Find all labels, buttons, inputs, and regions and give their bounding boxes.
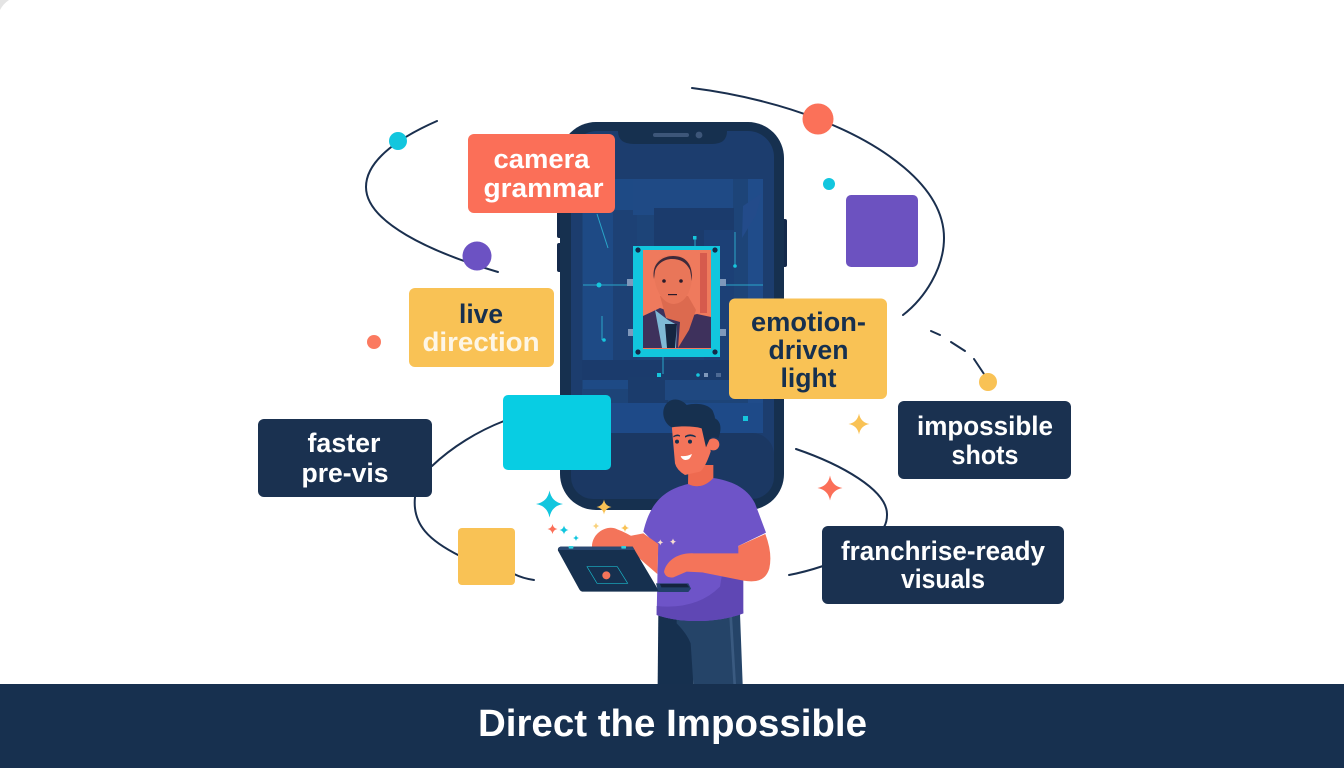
connector lines: left bbox=[415, 421, 534, 580]
tag: franchrise-ready visuals: visuals bbox=[901, 564, 985, 594]
portrait eyes and mouth bbox=[662, 279, 683, 295]
tag: impossible shots: shots bbox=[952, 440, 1018, 470]
orbit line: dashed to yellow dot bbox=[931, 331, 984, 374]
orbit line: top right bbox=[692, 88, 944, 315]
phone body bbox=[560, 122, 784, 510]
connector lines: right bbox=[789, 449, 887, 575]
tag: emotion-driven light: light bbox=[780, 363, 837, 393]
tag: franchrise-ready visuals: franchrise-ready bbox=[841, 536, 1045, 566]
decorative squares bbox=[458, 195, 918, 585]
hand over tablet bbox=[664, 553, 707, 578]
portrait neck and scarf bbox=[660, 296, 696, 348]
tag: emotion-driven light: driven bbox=[768, 335, 848, 365]
tag: camera grammar: grammar bbox=[484, 173, 604, 203]
scan lines and nodes bbox=[583, 214, 763, 421]
eyes and brows bbox=[673, 434, 696, 444]
smile bbox=[681, 454, 692, 460]
phone bbox=[557, 122, 787, 510]
orbit line: top left bbox=[366, 121, 498, 272]
title: Direct the Impossible bbox=[478, 703, 867, 745]
right arm bbox=[693, 534, 770, 581]
tablet top bar bbox=[559, 547, 635, 550]
right trouser leg bbox=[677, 613, 743, 684]
phone side buttons bbox=[557, 207, 787, 272]
notch bbox=[618, 131, 727, 144]
background text strip bbox=[700, 253, 707, 313]
person with tablet bbox=[558, 400, 770, 684]
shirt sparkles bbox=[657, 538, 676, 545]
tablet screen bbox=[558, 547, 659, 592]
neck bbox=[688, 465, 713, 487]
cyan frame bbox=[633, 246, 720, 357]
tag: impossible shots: impossible bbox=[917, 411, 1053, 441]
portrait jacket bbox=[643, 308, 711, 348]
tag: faster pre-vis: faster bbox=[308, 428, 381, 458]
tag: live direction: direction bbox=[422, 327, 540, 357]
trouser stripe bbox=[729, 615, 736, 684]
tag: emotion-driven light bbox=[729, 298, 887, 399]
portrait face bbox=[654, 255, 692, 304]
left trouser leg bbox=[658, 613, 693, 684]
tag: franchrise-ready visuals bbox=[822, 526, 1064, 604]
tag: camera grammar bbox=[468, 134, 615, 213]
tablet record frame bbox=[587, 567, 628, 583]
frame corner dots bbox=[635, 247, 718, 355]
tag: camera grammar: camera bbox=[494, 144, 590, 174]
decorative dots bbox=[367, 104, 997, 391]
tag: live direction: live bbox=[459, 299, 503, 329]
portrait hair bbox=[654, 256, 692, 281]
speaker and camera bbox=[653, 132, 702, 138]
ear bbox=[707, 438, 719, 450]
left hand bbox=[592, 528, 645, 557]
screen scene bbox=[571, 179, 774, 499]
tablet bbox=[558, 546, 691, 592]
t-shirt shade bbox=[657, 577, 743, 621]
tablet edge bbox=[656, 583, 691, 592]
face bbox=[672, 425, 711, 475]
tag: impossible shots bbox=[898, 401, 1071, 479]
portrait background bbox=[643, 250, 711, 349]
tablet indicators bbox=[569, 546, 573, 549]
hair bbox=[663, 400, 721, 447]
t-shirt bbox=[643, 478, 766, 621]
phone screen bbox=[571, 131, 774, 499]
tag: emotion-driven light: emotion- bbox=[751, 307, 866, 337]
tag: live direction bbox=[409, 288, 554, 367]
sparkles bbox=[536, 414, 870, 541]
bottom banner bbox=[0, 684, 1344, 768]
tag: faster pre-vis: pre-vis bbox=[302, 458, 388, 488]
left forearm bbox=[627, 533, 658, 574]
portrait in cyan frame bbox=[633, 246, 720, 357]
portrait shirt bbox=[655, 310, 677, 348]
tag: faster pre-vis bbox=[258, 419, 432, 497]
